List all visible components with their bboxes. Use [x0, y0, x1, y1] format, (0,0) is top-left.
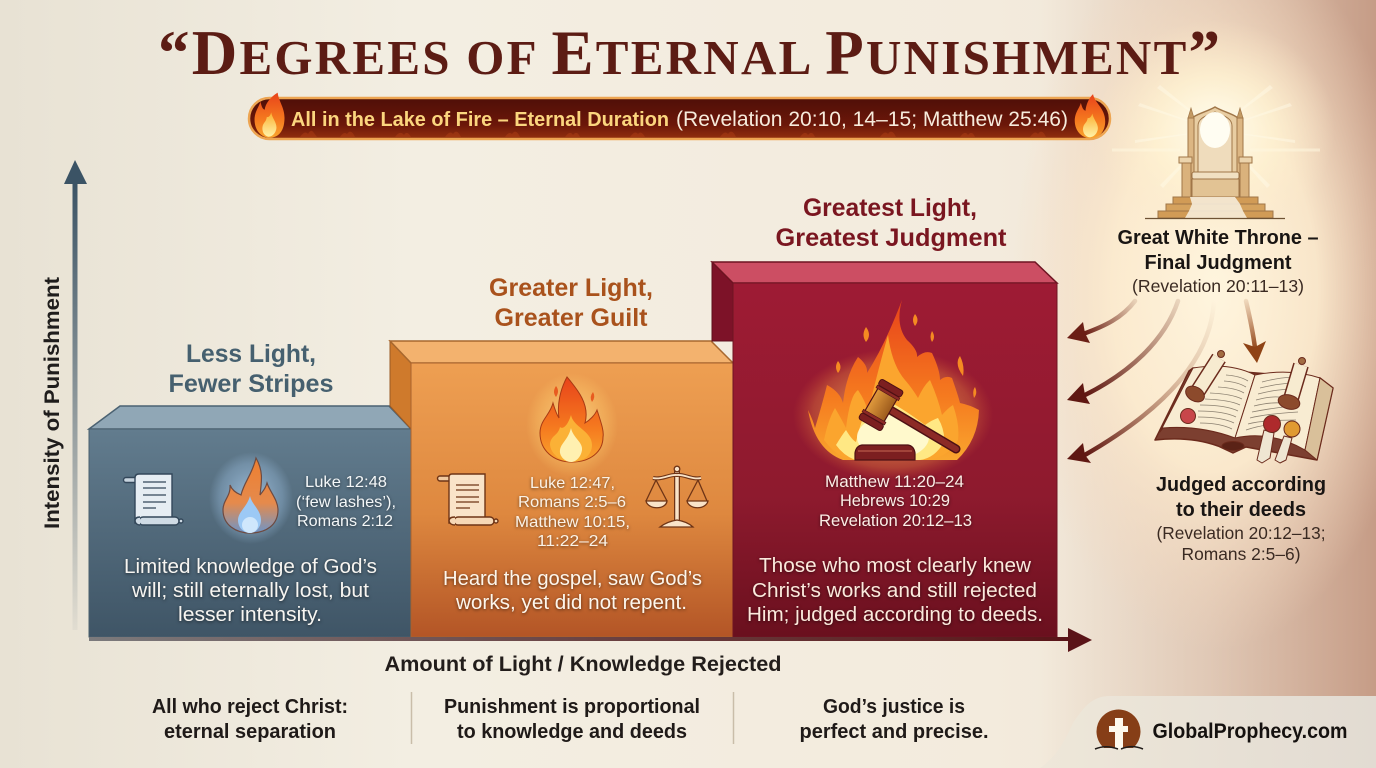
- scripture references: 11:22–24: [537, 533, 608, 550]
- heading: greater light: Greater Light,: [489, 274, 653, 302]
- scripture references: Luke 12:47,: [530, 475, 615, 492]
- icon: scroll: [438, 474, 498, 525]
- panel: greatest light: [712, 262, 1057, 637]
- banner text: references: (Revelation 20:10, 14–15; Matthew 25:46): [676, 108, 1068, 131]
- gavel: [855, 379, 956, 460]
- description: will; still eternally lost, but: [131, 580, 369, 602]
- y axis arrow: [64, 160, 87, 630]
- heading: less light: Fewer Stripes: [168, 370, 334, 398]
- bottom summary 3: perfect and precise.: [800, 721, 988, 743]
- description: Limited knowledge of God’s: [124, 556, 377, 578]
- icon: banner flame right: [1075, 94, 1105, 138]
- heading: less light: Less Light,: [186, 340, 316, 368]
- description: works, yet did not repent.: [455, 592, 687, 614]
- description: Christ’s works and still rejected: [752, 580, 1037, 602]
- logo text: GlobalProphecy.com: [1152, 719, 1348, 743]
- scripture references: Luke 12:48: [305, 474, 387, 491]
- text: judged according to deeds: Judged according: [1156, 474, 1326, 496]
- icon: blue flame: [209, 452, 293, 544]
- text: judged according to deeds: Romans 2:5–6): [1182, 544, 1300, 564]
- description: Him; judged according to deeds.: [747, 604, 1043, 626]
- heading: greater light: Greater Guilt: [494, 304, 648, 332]
- bottom summary 2: to knowledge and deeds: [457, 721, 687, 743]
- heading: greatest light: Greatest Judgment: [776, 224, 1007, 252]
- x axis label: Amount of Light / Knowledge Rejected: [384, 652, 782, 676]
- y axis label: Intensity of Punishment: [40, 277, 64, 529]
- panel: less light: [89, 406, 411, 637]
- panel: greater light: [390, 341, 733, 637]
- description: Heard the gospel, saw God’s: [443, 568, 702, 590]
- scripture references: Hebrews 10:29: [840, 492, 950, 510]
- text: great white throne: Final Judgment: [1144, 252, 1292, 274]
- description: Those who most clearly knew: [759, 555, 1032, 577]
- icon: great white throne: [1112, 85, 1320, 218]
- bottom summary 1: All who reject Christ:: [152, 696, 348, 718]
- logo panel: [1040, 696, 1376, 768]
- arrow to column middle: [1067, 301, 1178, 404]
- arrow to column top: [1067, 301, 1135, 343]
- text: great white throne: Great White Throne –: [1118, 227, 1318, 249]
- x axis arrow: [89, 628, 1092, 652]
- description: lesser intensity.: [178, 604, 322, 626]
- scripture references: Matthew 11:20–24: [825, 473, 964, 491]
- scripture references: (‘few lashes’),: [296, 494, 396, 511]
- arrow to book: [1243, 301, 1266, 363]
- scripture references: Romans 2:12: [297, 513, 393, 530]
- text: judged according to deeds: (Revelation 20:12–13;: [1156, 523, 1326, 543]
- icon: banner flame left: [255, 93, 285, 138]
- banner: lake of fire: [249, 93, 1110, 139]
- arrow to column bottom: [1067, 301, 1214, 463]
- scripture references: Matthew 10:15,: [515, 514, 630, 531]
- icon: scales: [646, 466, 708, 527]
- title: “DEGREES OF ETERNAL PUNISHMENT”: [158, 18, 1220, 88]
- scripture references: Revelation 20:12–13: [819, 512, 972, 530]
- icon: open book with scrolls: [1155, 350, 1333, 463]
- arrows to columns: [1067, 301, 1266, 463]
- icon: orange flame: [526, 373, 618, 477]
- text: great white throne: (Revelation 20:11–13): [1132, 276, 1304, 296]
- text: judged according to deeds: to their deeds: [1176, 499, 1306, 521]
- bottom summary 2: Punishment is proportional: [444, 696, 700, 718]
- icon: scroll: [124, 474, 183, 525]
- icon: flaming gavel: [793, 300, 993, 481]
- icon: cross logo: [1095, 709, 1143, 749]
- heading: greatest light: Greatest Light,: [803, 194, 977, 222]
- scripture references: Romans 2:5–6: [518, 494, 626, 511]
- bottom summary 3: God’s justice is: [823, 696, 965, 718]
- banner text: emphasis: All in the Lake of Fire – Eternal Duration: [291, 108, 669, 131]
- bottom summary 1: eternal separation: [164, 721, 336, 743]
